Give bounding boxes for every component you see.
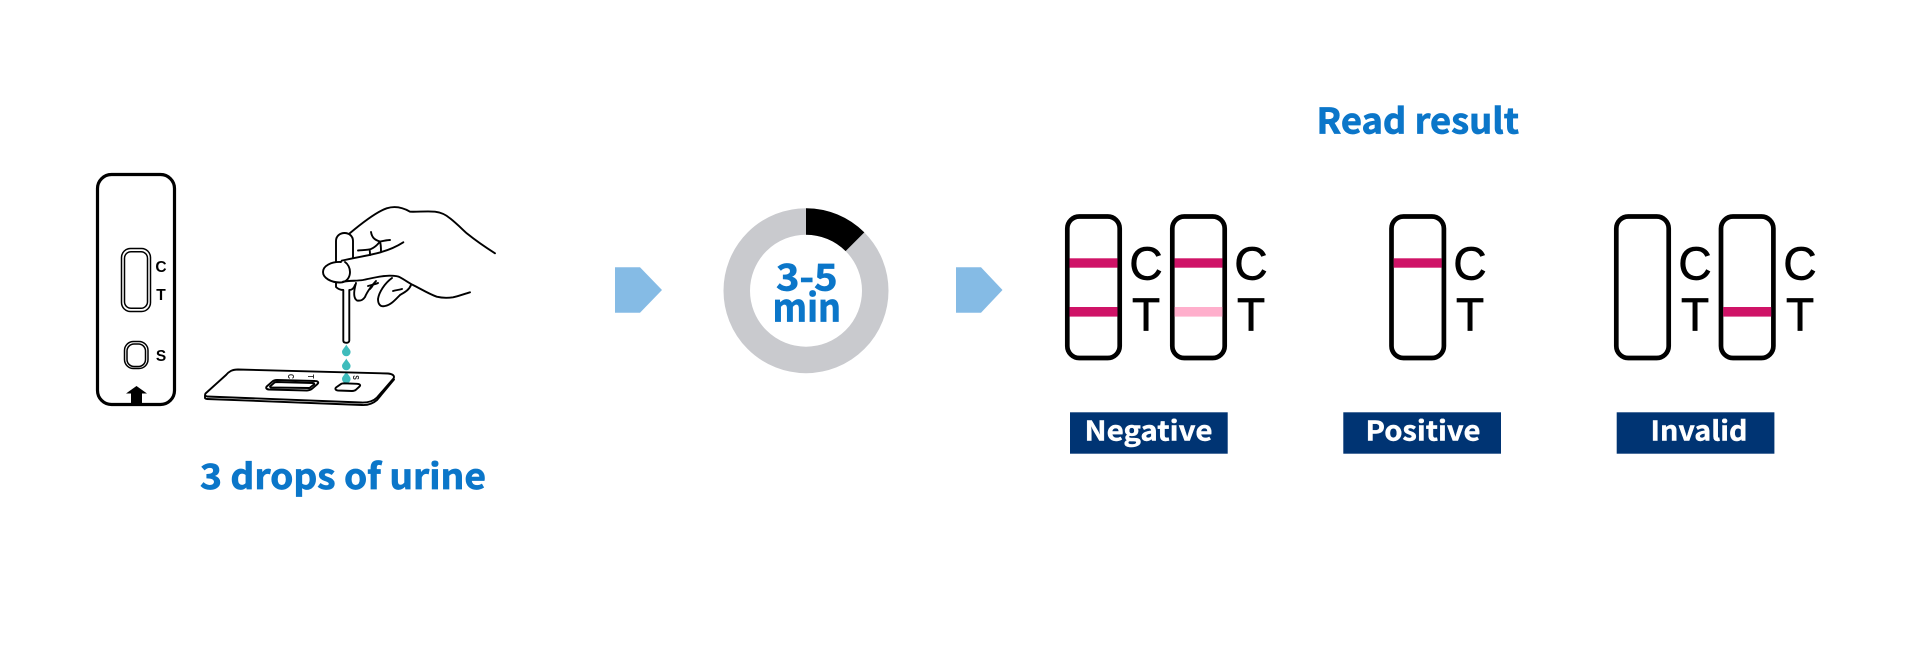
panel: add sample (98, 174, 495, 500)
icon: cassette lying flat: C (286, 374, 295, 379)
label: positive: Positive (1366, 410, 1480, 448)
test strip: negative, faint T line: T (1237, 289, 1265, 341)
label: invalid: Invalid (1650, 410, 1748, 448)
group: positive (1343, 216, 1501, 454)
test strip: invalid, T line only: T (1786, 289, 1814, 341)
arrow: step two to three (956, 267, 1002, 313)
label: invalid (1617, 410, 1774, 454)
label: negative: Negative (1084, 410, 1212, 448)
test strip: invalid, no lines (1616, 216, 1712, 358)
test strip: invalid, T line only (1721, 216, 1817, 358)
label: positive (1343, 410, 1501, 454)
test strip: positive: T (1456, 289, 1484, 341)
label: negative (1070, 410, 1228, 454)
test strip: negative, faint T line: C (1234, 238, 1268, 290)
icon: cassette lying flat (205, 370, 394, 405)
icon: cassette lying flat: T (306, 374, 315, 379)
test strip: invalid, no lines: C (1678, 238, 1712, 290)
panel: timer (737, 208, 875, 360)
icon: cassette lying flat: S (351, 375, 360, 380)
test strip: negative, faint T line (1172, 216, 1268, 358)
group: invalid (1616, 216, 1817, 454)
icon: test cassette: C (155, 259, 167, 276)
label: 3-5 min (772, 248, 841, 332)
arrow: step one to two (615, 267, 662, 313)
test strip: invalid, no lines: T (1681, 289, 1709, 341)
panel: read result (1067, 94, 1817, 454)
label: 3-5 min: 3-5 (776, 248, 838, 302)
chart: donut timer (737, 208, 875, 360)
heading: read result: Read result (1316, 94, 1519, 144)
test strip: positive: C (1453, 238, 1487, 290)
heading: 3 drops of urine: 3 drops of urine (200, 449, 486, 500)
test strip: negative, strong T line: C (1129, 238, 1163, 290)
test strip: invalid, T line only: C (1783, 238, 1817, 290)
icon: hand holding dropper (323, 207, 495, 343)
icon: test cassette: S (156, 348, 166, 365)
icon: test cassette: T (156, 287, 166, 304)
icon: urine drops (342, 344, 351, 383)
label: 3-5 min: min (772, 278, 841, 332)
group: negative (1067, 216, 1268, 454)
test strip: positive (1392, 216, 1487, 358)
test strip: negative, strong T line: T (1132, 289, 1160, 341)
icon: test cassette (98, 174, 174, 405)
test strip: negative, strong T line (1067, 216, 1163, 358)
